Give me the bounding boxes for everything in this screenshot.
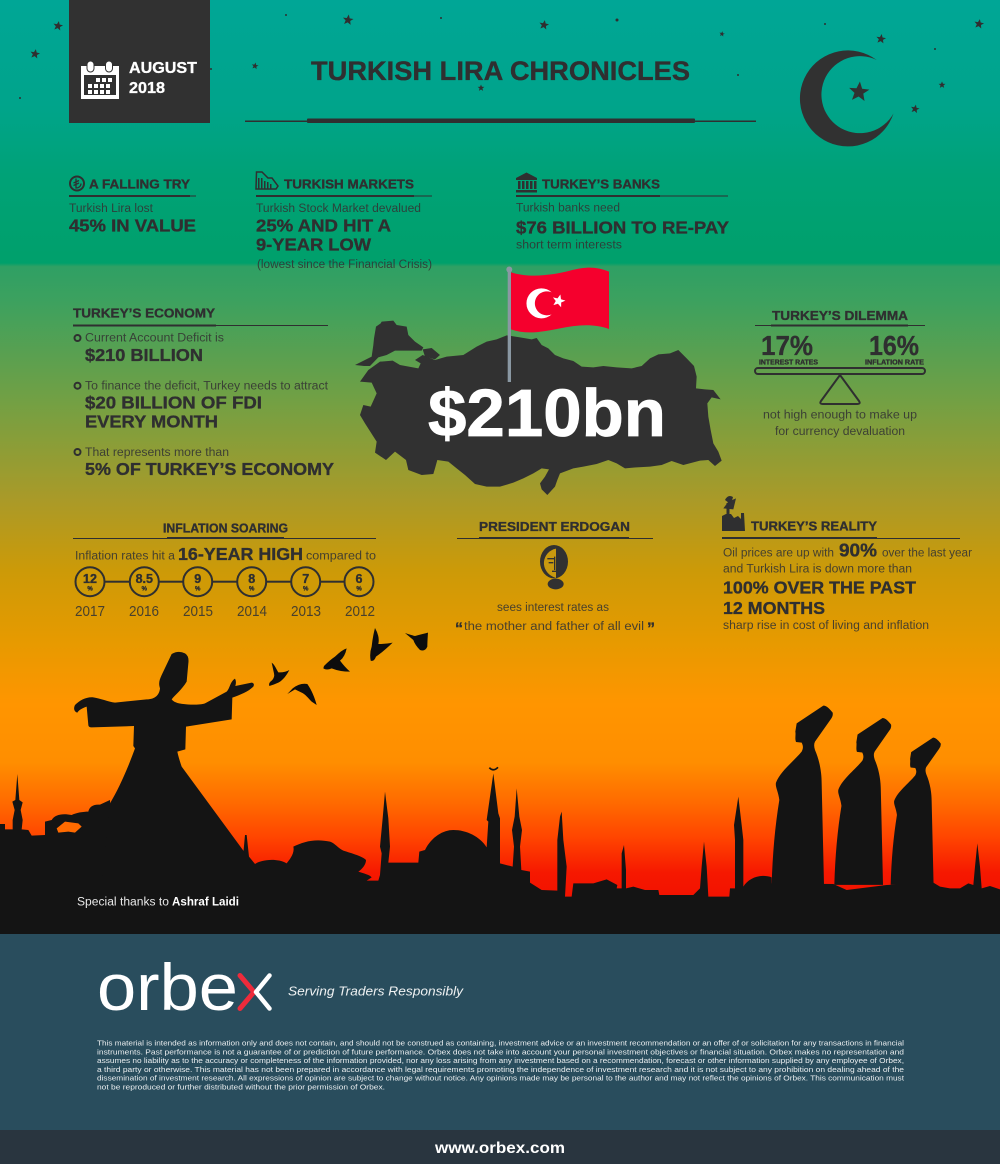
icon: lira coin	[70, 176, 84, 190]
panel: date badge	[69, 0, 210, 123]
panel: turkey's economy	[73, 306, 334, 479]
heading rule	[755, 324, 925, 326]
percent signs: %	[87, 586, 93, 592]
panel: turkey's reality	[722, 496, 972, 632]
percent signs: %	[142, 586, 148, 592]
body text: Turkish Lira lost	[69, 203, 154, 215]
key figure: 12 MONTHS	[723, 598, 825, 618]
heading: TURKISH MARKETS	[284, 176, 414, 192]
item: share of economy: 5% OF TURKEY’S ECONOMY	[85, 459, 334, 479]
heading rule	[722, 537, 960, 539]
caption: sees interest rates as	[497, 602, 609, 614]
eastern skyline	[500, 788, 1000, 937]
icon: portrait	[540, 545, 568, 589]
oil sentence	[723, 541, 972, 575]
date text	[129, 60, 198, 97]
heading rule	[73, 537, 376, 539]
years: 2013	[291, 604, 321, 620]
interest rate: 17%	[761, 330, 813, 361]
heading rule	[256, 195, 432, 197]
rate values: 12	[83, 572, 97, 586]
heading: TURKEY’S DILEMMA	[772, 308, 908, 323]
panel: president erdogan	[455, 519, 655, 638]
icon: crescent and star	[800, 50, 894, 146]
rate values: 6	[356, 572, 363, 586]
interest rate: INTEREST RATES	[759, 359, 818, 366]
inflation rate: 16%	[869, 330, 919, 361]
item: fdi needed: To finance the deficit, Turkey needs to attract	[85, 380, 329, 392]
disclaimer: instruments. Past performance is not a guarantee of or prediction of future performance. Orbex does not take into account your personal investment objectives or financial situation. Orbex makes no representation and	[97, 1047, 904, 1056]
starry sky	[19, 14, 985, 113]
quotation: ”	[647, 619, 655, 638]
body text: Turkish banks need	[516, 203, 620, 215]
website bar	[0, 1130, 1000, 1164]
date text: 2018	[129, 80, 165, 97]
logo: orbex: orbe	[97, 950, 238, 1024]
heading: TURKEY’S BANKS	[542, 176, 660, 192]
icon: balance scale	[755, 368, 925, 404]
panel: turkish markets	[256, 172, 432, 271]
three standing figures	[772, 706, 941, 885]
item: fdi needed: $20 BILLION OF FDI	[85, 392, 262, 412]
timeline chart	[75, 567, 375, 620]
panel: turkey's banks	[516, 172, 729, 252]
sentence: Inflation rates hit a	[75, 550, 176, 562]
item: current account deficit	[74, 333, 224, 365]
note: short term interests	[516, 240, 622, 252]
big number: $210bn	[428, 376, 666, 451]
percent signs: %	[356, 586, 362, 592]
item: share of economy: That represents more than	[85, 447, 229, 459]
disclaimer: This material is intended as information only and does not contain, and should not be construed as containing, investment advice or an investment recommendation or an offer of or solicitation for any transactions in financial	[97, 1038, 904, 1048]
heading rule	[516, 195, 728, 197]
heading rule	[457, 537, 653, 539]
title: TURKISH LIRA CHRONICLES	[311, 56, 690, 86]
quotation: the mother and father of all evil	[464, 621, 644, 633]
item: current account deficit: $210 BILLION	[85, 345, 203, 365]
credit: Special thanks to	[77, 897, 169, 909]
item: share of economy	[74, 447, 334, 479]
quotation: “	[455, 619, 463, 638]
note: (lowest since the Financial Crisis)	[257, 259, 432, 271]
disclaimer: not be reproduced or further distributed without the prior permission of Orbex.	[97, 1082, 385, 1091]
credit: Ashraf Laidi	[172, 897, 239, 909]
icon: bank building	[516, 172, 537, 192]
rate values: 9	[194, 572, 201, 586]
heading: TURKEY’S REALITY	[751, 519, 877, 534]
disclaimer: dissemination of investment research. All expressions of opinion are subject to change without notice. Any opinions made may be personal to the author and may not reflect the opinions of Orbex. This communication must	[97, 1074, 904, 1083]
percent signs	[87, 586, 362, 592]
caption: not high enough to make up	[763, 410, 917, 422]
years: 2017	[75, 604, 105, 620]
heading rule	[69, 195, 196, 197]
credit	[77, 897, 239, 909]
item: current account deficit: Current Account Deficit is	[85, 333, 224, 345]
whirling dervish	[74, 652, 257, 900]
icon: calendar	[81, 61, 119, 99]
years: 2012	[345, 604, 375, 620]
tagline: Serving Traders Responsibly	[288, 984, 465, 999]
caption	[763, 410, 917, 438]
heading: A FALLING TRY	[89, 176, 190, 192]
sentence: compared to	[306, 550, 376, 562]
skyline silhouette with whirling dervish	[0, 628, 1000, 937]
date text: AUGUST	[129, 60, 198, 77]
heading rule	[73, 324, 328, 326]
percent signs: %	[249, 586, 255, 592]
key figure: $76 BILLION TO RE-PAY	[516, 218, 729, 238]
years: 2014	[237, 604, 267, 620]
oil sentence: 90%	[839, 541, 877, 561]
oil sentence: over the last year	[882, 548, 972, 560]
quotation	[455, 619, 655, 638]
percent signs: %	[303, 586, 309, 592]
years	[75, 604, 375, 620]
minaret crescent	[489, 767, 498, 770]
website bar: www.orbex.com	[434, 1140, 565, 1157]
map silhouette	[355, 321, 736, 509]
birds in flight	[269, 628, 428, 705]
western skyline	[0, 773, 500, 937]
heading: INFLATION SOARING	[163, 521, 288, 535]
rate values: 7	[302, 572, 309, 586]
rate values: 8.5	[136, 572, 153, 586]
panel: turkey's dilemma	[755, 308, 925, 438]
oil sentence: Oil prices are up with	[723, 548, 834, 560]
flag pole	[506, 266, 512, 382]
sentence: 16-YEAR HIGH	[178, 544, 303, 564]
turkish flag	[511, 268, 609, 332]
panel: inflation soaring	[73, 521, 376, 620]
disclaimer: a third party or otherwise. This material has not been prepared in accordance with legal requirements promoting the independence of investment research and it is not subject to any prohibition on dealing ahead of the	[97, 1065, 904, 1074]
disclaimer	[97, 1038, 904, 1091]
oil sentence: and Turkish Lira is down more than	[723, 563, 912, 575]
orange gaps in foliage	[57, 822, 82, 833]
heading: PRESIDENT ERDOGAN	[479, 519, 630, 534]
icon: factory	[722, 496, 745, 531]
disclaimer: assumes no liability as to the accuracy or completeness of the information provided, nor any loss arising from any investment based on a recommendation, forecast or other information supplied by any employee of Orbex,	[97, 1056, 904, 1065]
rate values	[83, 572, 363, 586]
icon: falling market chart	[256, 172, 278, 189]
key figure: 9-YEAR LOW	[256, 235, 371, 255]
key figure	[723, 577, 916, 618]
body text: Turkish Stock Market devalued	[256, 203, 421, 215]
inflation rate: INFLATION RATE	[865, 359, 924, 366]
percent signs: %	[195, 586, 201, 592]
panel: a falling try	[69, 176, 196, 236]
key figure: 45% IN VALUE	[69, 216, 196, 236]
map of turkey with flag	[355, 266, 736, 509]
title underline	[245, 118, 756, 123]
sentence	[75, 544, 376, 564]
item: fdi needed	[74, 380, 329, 432]
rate values: 8	[248, 572, 255, 586]
caption: for currency devaluation	[775, 426, 905, 438]
years: 2016	[129, 604, 159, 620]
years: 2015	[183, 604, 213, 620]
footer panel	[0, 934, 1000, 1130]
key figure: 25% AND HIT A	[256, 216, 391, 236]
key figure	[256, 216, 391, 255]
note: sharp rise in cost of living and inflation	[723, 620, 929, 632]
item: fdi needed: EVERY MONTH	[85, 412, 218, 432]
key figure: 100% OVER THE PAST	[723, 577, 916, 597]
heading: TURKEY’S ECONOMY	[73, 306, 215, 321]
